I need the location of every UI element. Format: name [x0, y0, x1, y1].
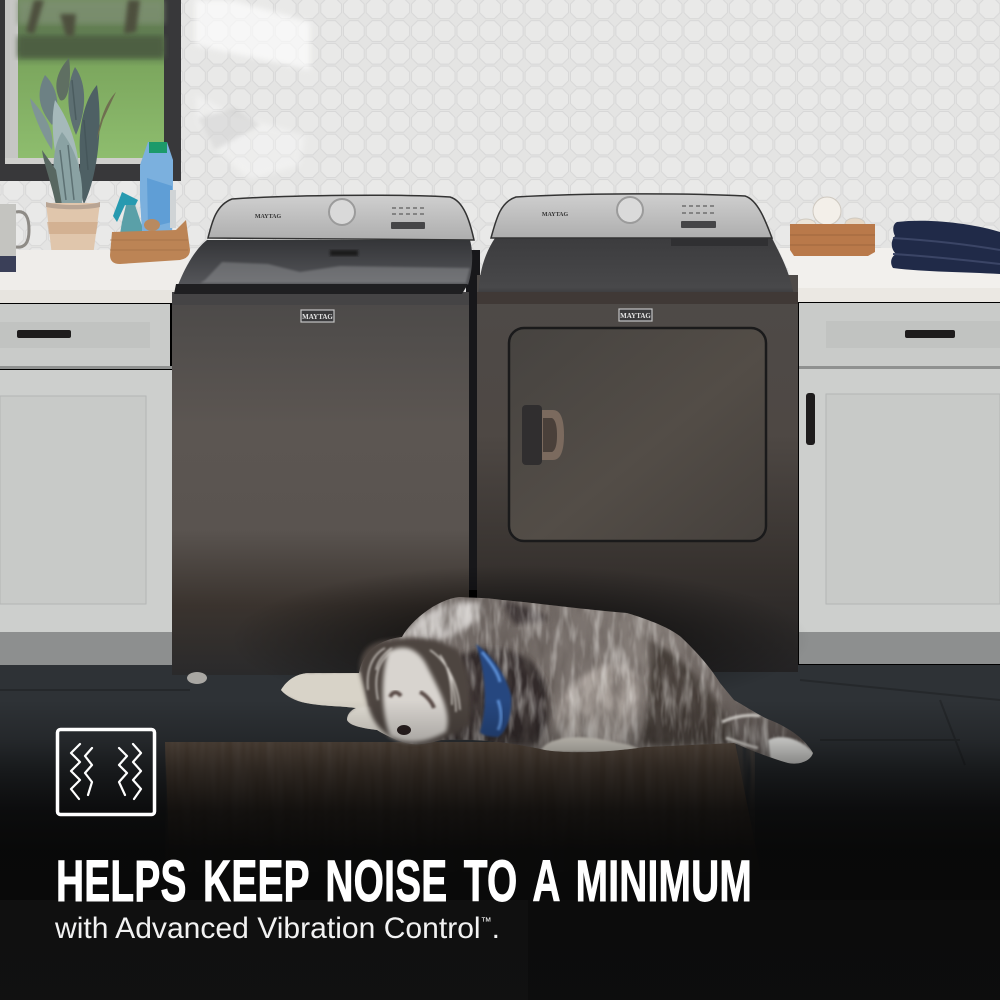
detergent bottle: [140, 142, 176, 232]
folded navy towels: [891, 221, 1000, 274]
washer glass lid: [178, 240, 472, 285]
mug: [0, 204, 29, 272]
dryer badge: [619, 309, 652, 321]
terracotta pot: [46, 203, 100, 258]
front leg: [275, 672, 370, 712]
tail tip: [768, 737, 816, 765]
lid front edge: [174, 284, 468, 294]
spray bottle: [113, 192, 142, 234]
dog coat: [275, 590, 820, 770]
washer console: [208, 195, 474, 240]
washer control buttons: [391, 208, 426, 229]
dryer door: [509, 328, 766, 541]
plant leaves: [30, 58, 116, 205]
dryer badge: MAYTAG: [620, 312, 651, 320]
right door: [799, 369, 1000, 632]
counter left: [0, 250, 192, 296]
blue bandana: [476, 644, 511, 737]
icon: vibration control: [58, 730, 154, 814]
right cabinets: [799, 303, 1000, 664]
dryer console: [491, 194, 772, 238]
left drawer: [0, 304, 172, 369]
wicker basket with eggs: [790, 197, 875, 256]
dark gradient overlay: [0, 700, 1000, 1000]
dryer control buttons: [681, 206, 716, 228]
near paw: [540, 737, 640, 752]
dryer body: [477, 275, 798, 672]
fur dark texture: [404, 599, 728, 744]
dryer dial: [617, 197, 643, 223]
lid reflection: [200, 262, 470, 283]
woven rug: [165, 742, 760, 872]
washer logo console: MAYTAG: [255, 214, 281, 220]
shoulder highlight: [400, 602, 483, 640]
far paw: [345, 706, 395, 738]
gap between machines: [466, 250, 480, 590]
washer body: [172, 292, 469, 675]
dial reflection: [330, 250, 358, 256]
tiled back wall: [0, 0, 1000, 300]
washer badge: MAYTAG: [302, 313, 333, 321]
left door: [0, 370, 172, 632]
left cabinets: [0, 304, 172, 666]
lint trap: [671, 238, 768, 246]
washer band: [172, 292, 469, 305]
subheading: ™: [481, 916, 492, 928]
shadow behind dog: [230, 565, 810, 715]
dryer logo console: MAYTAG: [542, 212, 568, 218]
lower floor band: [0, 900, 528, 1000]
counter edges: [0, 288, 1000, 303]
right drawer: [799, 303, 1000, 369]
subheading: .: [492, 912, 500, 945]
dryer band: [477, 292, 798, 304]
fur light texture: [284, 598, 809, 756]
subheading: with Advanced Vibration Control: [55, 912, 480, 945]
dog: [275, 590, 820, 770]
left toe kick: [0, 632, 172, 666]
hip highlight: [555, 664, 639, 745]
vibration waves: [71, 744, 141, 799]
washer foot: [187, 672, 207, 684]
counter right: [778, 248, 1000, 295]
dark shading: [445, 648, 549, 745]
right toe kick: [799, 632, 1000, 664]
floor: [0, 665, 1000, 1000]
dog head: [360, 638, 471, 743]
window: [0, 0, 181, 181]
dryer: [477, 194, 798, 672]
lower floor band right: [528, 900, 1000, 1000]
washer dial: [329, 199, 355, 225]
plant in pot: [30, 58, 116, 258]
dog nose: [397, 725, 411, 735]
dryer top: [478, 238, 795, 300]
door handle: [522, 405, 564, 465]
tail streaks: [722, 715, 760, 748]
washer badge: [301, 310, 334, 322]
wicker basket left: [110, 219, 190, 264]
washer: [172, 195, 474, 675]
